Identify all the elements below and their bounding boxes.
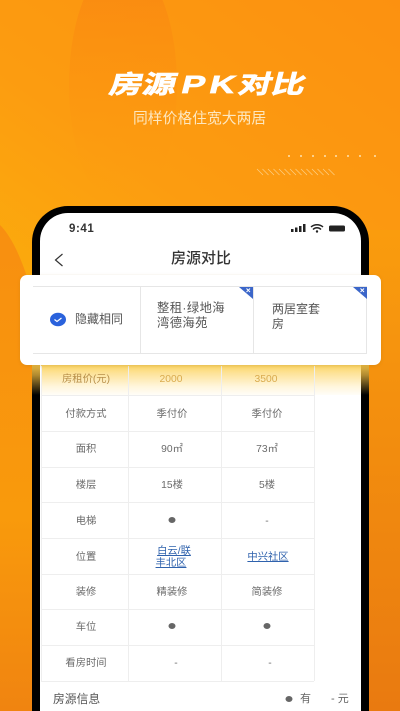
remove badge 1 xyxy=(239,287,253,299)
comparison table: 90㎡ xyxy=(161,444,183,455)
listing 2 name: 两居室套 xyxy=(272,302,320,316)
hide same label: 隐藏相同 xyxy=(75,312,123,326)
phone screen xyxy=(40,213,361,711)
comparison table: 丰北区 xyxy=(156,558,186,569)
title xyxy=(107,70,309,99)
section row: listing info: 有 xyxy=(300,693,311,705)
row: location: 位置 xyxy=(76,552,96,563)
listing 2 name: 房 xyxy=(272,316,284,330)
comparison table: 中兴社区 xyxy=(247,552,289,563)
comparison table: 精装修 xyxy=(157,587,187,598)
row: viewing time: 看房时间 xyxy=(65,658,107,669)
listing 1 name: 整租·绿地海 xyxy=(157,301,225,315)
listing 1 name: 湾德海苑 xyxy=(157,316,208,330)
comparison table: 白云/联 xyxy=(157,546,191,557)
row: payment: 付款方式 xyxy=(65,409,107,420)
status bar time: 9:41 xyxy=(69,223,94,235)
comparison table: - xyxy=(265,516,269,527)
comparison table: 15楼 xyxy=(161,480,183,491)
section row: listing info xyxy=(53,692,349,706)
title: K xyxy=(207,70,239,99)
hide same checkbox xyxy=(50,312,66,326)
highlight gradient xyxy=(41,362,361,395)
row: rent: 3500 xyxy=(255,374,277,385)
row: parking: 车位 xyxy=(76,622,96,633)
listing 2 name xyxy=(272,302,320,330)
row: elevator: 电梯 xyxy=(76,516,96,527)
comparison table: 73㎡ xyxy=(256,444,278,455)
floating comparison card xyxy=(20,275,381,365)
screen title: 房源对比 xyxy=(171,250,231,267)
comparison table: - xyxy=(174,658,178,669)
section row: listing info: - 元 xyxy=(331,693,349,705)
title: 房源 xyxy=(107,71,180,99)
comparison table: 季付价 xyxy=(157,409,187,420)
comparison table: 季付价 xyxy=(252,409,282,420)
title: 对比 xyxy=(236,71,309,99)
subtitle: 同样价格住宽大两居 xyxy=(133,111,266,127)
comparison table: 简装修 xyxy=(252,587,282,598)
decorative dots xyxy=(256,155,376,176)
row: area: 面积 xyxy=(76,444,96,455)
comparison table: 5楼 xyxy=(259,480,275,491)
row: rent xyxy=(62,373,278,385)
section row: listing info: 房源信息 xyxy=(53,692,100,706)
row: floor: 楼层 xyxy=(76,480,96,491)
back arrow xyxy=(54,254,63,266)
card grid xyxy=(33,286,367,354)
title: P xyxy=(179,70,209,99)
remove badge 2 xyxy=(353,287,367,299)
listing 1 name xyxy=(157,301,225,330)
status bar icons xyxy=(291,224,345,233)
comparison table: - xyxy=(268,658,272,669)
row: rent: 房租价(元) xyxy=(62,374,110,385)
row: rent: 2000 xyxy=(160,374,182,385)
row: decoration: 装修 xyxy=(76,587,96,598)
phone frame xyxy=(32,206,369,711)
